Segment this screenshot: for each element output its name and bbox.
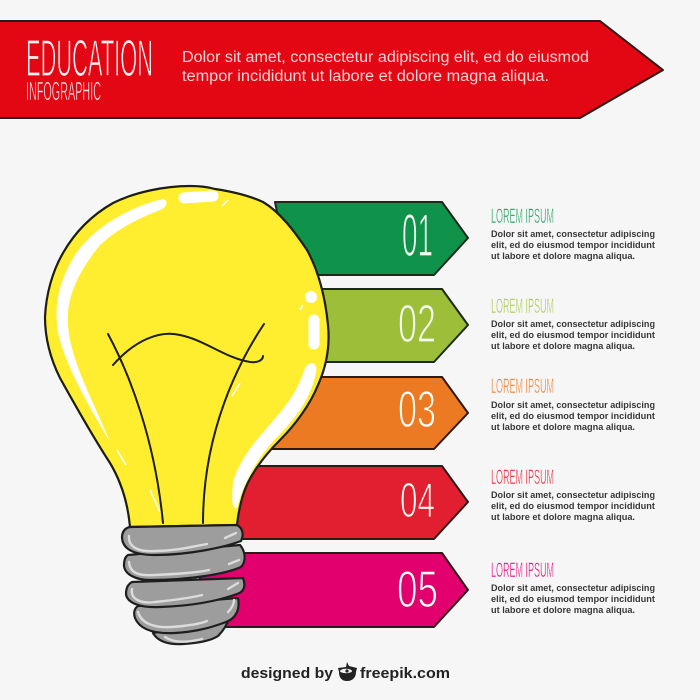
title	[26, 30, 153, 106]
icon: freepik logo	[338, 662, 357, 681]
text block 02	[491, 295, 656, 352]
screw base	[122, 525, 245, 644]
text block 04	[491, 466, 656, 523]
filament	[108, 324, 264, 523]
banner text	[182, 49, 589, 85]
text block 01: Dolor sit amet, consectetur adipiscing	[491, 229, 655, 240]
text block 04: LOREM IPSUM	[491, 466, 554, 489]
text block 05: ut labore et dolore magna aliqua.	[491, 605, 635, 616]
banner text: tempor incididunt ut labore et dolore magna aliqua.	[182, 68, 549, 85]
text block 01: LOREM IPSUM	[491, 205, 554, 228]
text block 03: LOREM IPSUM	[491, 375, 554, 398]
text block 02: ut labore et dolore magna aliqua.	[491, 341, 635, 352]
text block 01: ut labore et dolore magna aliqua.	[491, 251, 635, 262]
text block 01: elit, ed do eiusmod tempor incididunt	[491, 240, 656, 251]
header banner	[0, 21, 663, 118]
text block 05: elit, ed do eiusmod tempor incididunt	[491, 594, 656, 605]
text block 04: elit, ed do eiusmod tempor incididunt	[491, 501, 656, 512]
footer credit: freepik.com	[360, 665, 450, 682]
text block 04: ut labore et dolore magna aliqua.	[491, 512, 635, 523]
arrow 01: 01	[402, 202, 433, 269]
arrow 02: 02	[398, 294, 436, 354]
light bulb	[45, 186, 329, 644]
base highlights	[129, 533, 239, 642]
text block 02: elit, ed do eiusmod tempor incididunt	[491, 330, 656, 341]
glass highlights	[57, 196, 317, 512]
header banner: EDUCATION	[26, 30, 153, 88]
text block 05: LOREM IPSUM	[491, 559, 554, 582]
text block 02: Dolor sit amet, consectetur adipiscing	[491, 319, 655, 330]
arrow 03	[270, 377, 468, 449]
banner text: Dolor sit amet, consectetur adipiscing elit, ed do eiusmod	[182, 49, 589, 66]
text block 02: LOREM IPSUM	[491, 295, 554, 318]
text block 05: Dolor sit amet, consectetur adipiscing	[491, 583, 655, 594]
text block 03: ut labore et dolore magna aliqua.	[491, 422, 635, 433]
arrow 05: 05	[397, 561, 438, 619]
footer credit: designed by	[241, 665, 334, 682]
icon: bulb glass	[45, 186, 329, 527]
text block 03: elit, ed do eiusmod tempor incididunt	[491, 411, 656, 422]
arrow 02	[300, 289, 468, 362]
text block 03: Dolor sit amet, consectetur adipiscing	[491, 400, 655, 411]
text block 01	[491, 205, 656, 262]
text block 05	[491, 559, 656, 616]
text block 04: Dolor sit amet, consectetur adipiscing	[491, 490, 655, 501]
footer credit	[241, 662, 450, 682]
arrow 04: 04	[400, 474, 435, 528]
arrow 01	[275, 202, 468, 275]
arrow 05	[200, 553, 468, 627]
arrow 04	[230, 466, 468, 539]
text block 03	[491, 375, 656, 433]
title: INFOGRAPHIC	[26, 76, 101, 106]
banner arrow shape	[0, 21, 663, 118]
arrow 03: 03	[398, 381, 436, 439]
